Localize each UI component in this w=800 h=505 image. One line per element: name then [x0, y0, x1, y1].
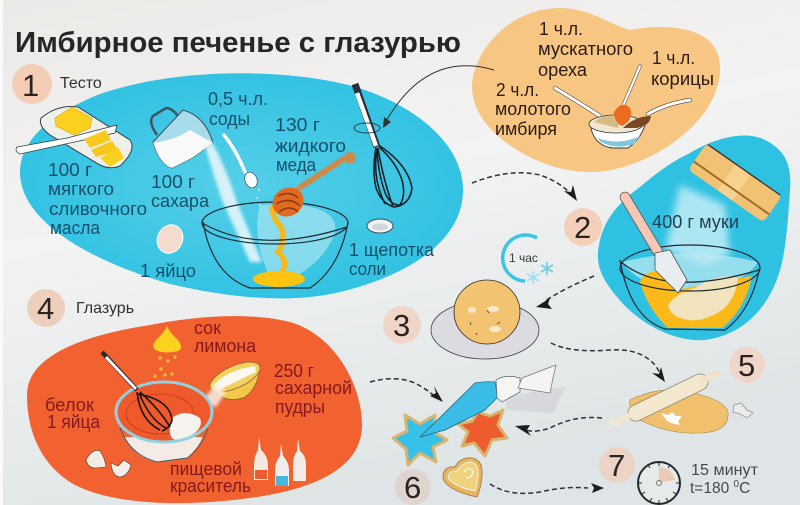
text: baking time: 0 — [734, 479, 740, 490]
arrow: spices to whisk — [383, 66, 494, 128]
text: spices: корицы — [651, 69, 714, 89]
icon: dough ball on plate — [431, 280, 539, 359]
text: dough ingredients: соды — [209, 109, 250, 129]
text: glaze: 1 яйца — [47, 412, 101, 432]
text: flour: 400 г муки — [652, 212, 739, 232]
step badge 7: 7 — [608, 448, 625, 483]
step badge 3 — [383, 306, 421, 344]
text: dough ingredients: 100 г — [151, 172, 195, 192]
icon: sieve — [688, 144, 782, 222]
icon: blue star cookie — [393, 415, 447, 465]
step badge 4: 4 — [37, 291, 54, 326]
text: dough ingredients: сахара — [151, 191, 210, 211]
text: dough ingredients: 1 щепотка — [349, 240, 435, 260]
text: glaze: пищевой — [170, 459, 242, 479]
text: dough ingredients: соли — [349, 259, 386, 279]
text: glaze: сахарной — [275, 378, 352, 398]
text: spices: имбиря — [495, 119, 557, 139]
step badge 6: 6 — [404, 470, 421, 505]
icon: mixing bowl with honey — [202, 152, 356, 288]
step badge 4 — [27, 289, 65, 327]
text: spices: ореха — [538, 60, 588, 80]
text: spices — [495, 19, 714, 139]
arrow: glaze to step 6 — [370, 379, 443, 402]
step badge 5: 5 — [738, 348, 755, 383]
icon: food colour bottles — [254, 437, 306, 486]
icon: heart cookie — [443, 458, 482, 497]
text: glaze — [45, 318, 352, 496]
icon: whisk — [354, 84, 412, 207]
text: dough ingredients: 1 яйцо — [140, 261, 196, 281]
text: glaze: лимона — [194, 336, 257, 356]
icon: butter dish — [16, 106, 132, 168]
icon: egg — [153, 221, 187, 257]
arrow: step 3 to step 5 — [551, 343, 665, 382]
text: glaze: белок — [45, 395, 94, 415]
text: baking time: C — [739, 480, 750, 497]
text: baking time — [690, 462, 758, 497]
text: baking time: 15 минут — [691, 462, 758, 479]
icon: oven timer clock — [638, 462, 680, 504]
text: spices: мускатного — [538, 39, 633, 59]
arrow: step 5 to step 6 — [515, 417, 602, 436]
icon: eggshells — [86, 450, 131, 477]
icon: bowl with dough — [620, 245, 760, 330]
panel: dough ingredients — [16, 73, 463, 298]
text: glaze: 250 г — [274, 361, 314, 381]
text: baking time: t=180 — [690, 480, 729, 497]
icon: shadow — [505, 387, 565, 413]
flour dust — [665, 185, 730, 265]
step badge 6 — [395, 469, 431, 505]
arrow: step 1 to step 2 — [472, 173, 577, 201]
icon: rolling pin and rolled dough — [610, 374, 753, 433]
text: spices: молотого — [495, 99, 571, 119]
step badge 7 — [599, 447, 635, 483]
text: dough ingredients: 130 г — [275, 115, 320, 135]
icon: lemon — [153, 326, 181, 388]
step badge 1 — [12, 64, 52, 104]
arrow: step 2 to step 3 — [536, 276, 594, 309]
text: dough ingredients: 100 г — [48, 160, 92, 180]
step badge 2 — [564, 208, 602, 246]
text: glaze: пудры — [275, 397, 325, 417]
text: glaze: краситель — [170, 476, 251, 496]
icon: bowl with whisk — [102, 352, 212, 462]
icon: salt — [367, 219, 393, 233]
text: spices: 1 ч.л. — [652, 48, 695, 68]
arrow: step 6 to step 7 — [490, 483, 604, 493]
sugar stream — [205, 142, 262, 262]
text: dough ingredients — [48, 89, 435, 281]
icon: one hour timer: 1 час — [509, 251, 538, 265]
text: spices: 2 ч.л. — [496, 80, 539, 100]
icon: measuring cup — [151, 108, 213, 168]
panel: glaze — [27, 316, 362, 503]
text: dough ingredients: мягкого — [48, 179, 114, 199]
step badge 2: 2 — [574, 210, 591, 245]
panel: spices — [472, 8, 720, 172]
step badge 5 — [729, 347, 765, 383]
text: dough ingredients: меда — [276, 155, 317, 175]
icon: red star cookie — [458, 410, 507, 456]
step badge 1: 1 — [22, 68, 39, 103]
icon: one hour timer — [503, 235, 553, 284]
text: dough ingredients: жидкого — [275, 136, 346, 156]
heading: glaze: Глазурь — [76, 300, 134, 317]
text: dough ingredients: 0,5 ч.л. — [208, 89, 268, 109]
text: glaze: сок — [194, 318, 221, 338]
icon: powdered sugar bowl — [200, 356, 264, 407]
text: dough ingredients: масла — [50, 218, 101, 238]
title: Имбирное печенье с глазурью — [15, 27, 461, 59]
text: dough ingredients: сливочного — [49, 199, 147, 219]
text: spices: 1 ч.л. — [539, 19, 583, 39]
step badge 3: 3 — [393, 308, 410, 343]
icon: piping bag — [420, 365, 556, 437]
icon: spoon with soda — [224, 135, 261, 206]
icon: spice bowl with spoons — [555, 66, 690, 148]
icon: spatula — [625, 197, 687, 293]
heading: dough: Тесто — [60, 75, 102, 92]
panel: flour step — [598, 136, 790, 340]
